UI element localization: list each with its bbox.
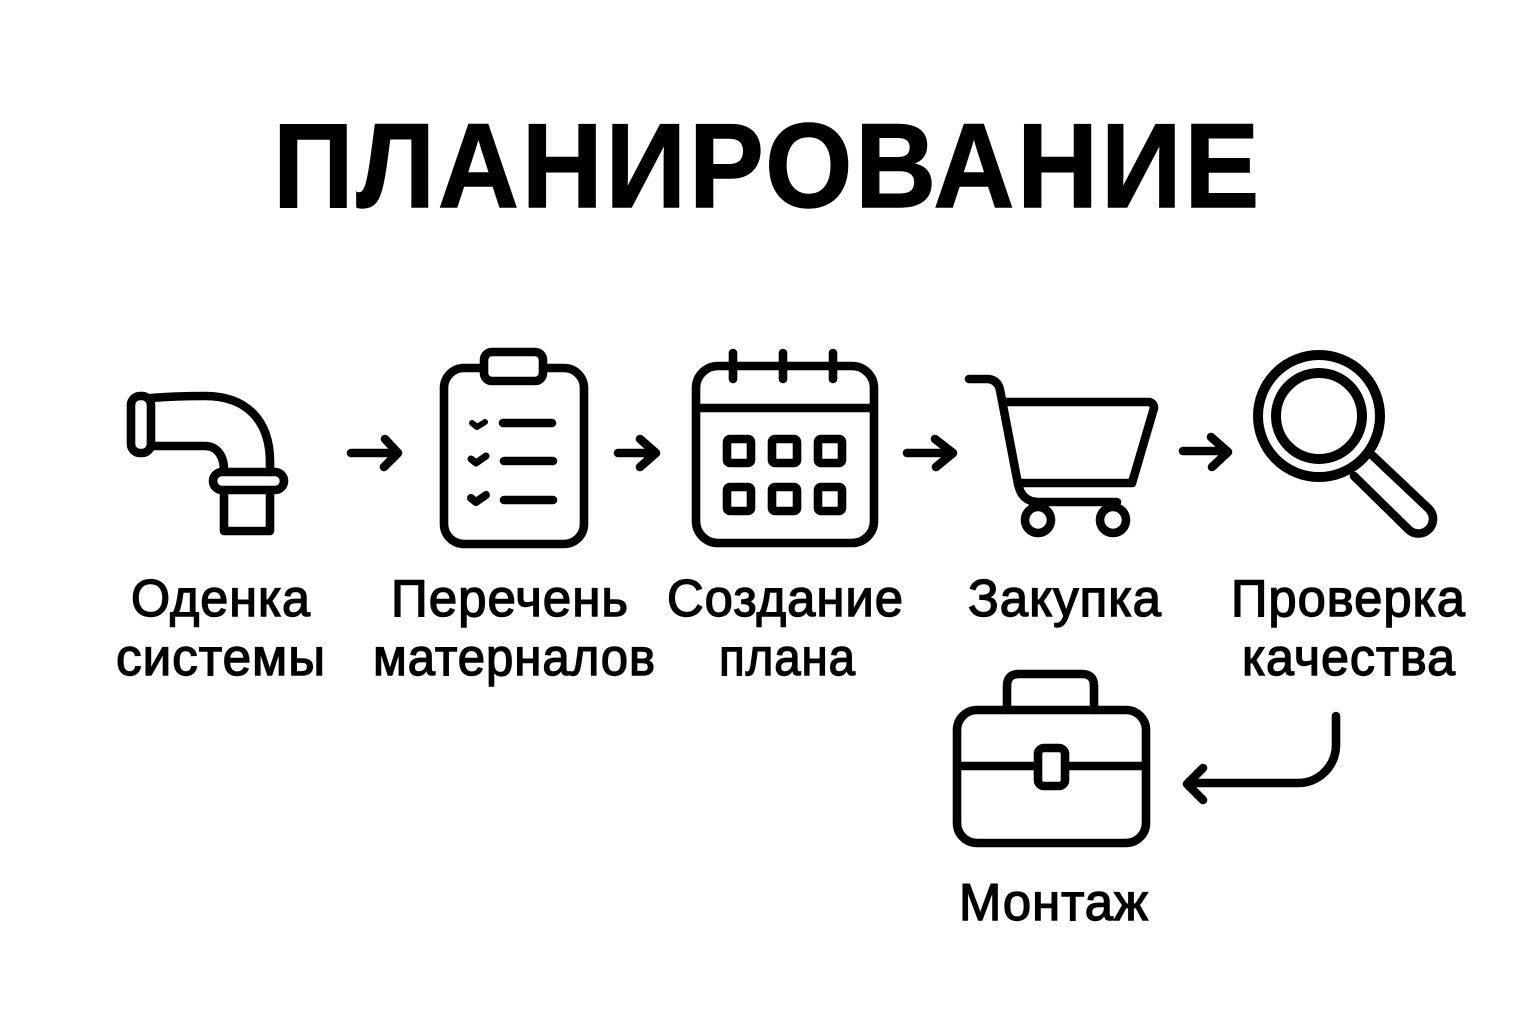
step: purchase [968, 379, 1162, 628]
arrow: step 3 to 4 [907, 439, 953, 467]
label: installation: Монтаж [959, 874, 1149, 932]
title: ПЛАНИРОВАНИЕ [273, 99, 1262, 233]
label: system assessment: системы [116, 629, 326, 687]
arrow: step 1 to 2 [351, 439, 398, 467]
arrow: step 2 to 3 [618, 439, 656, 467]
label: materials list [373, 570, 656, 687]
arrow: step 5 back to installation [1187, 716, 1336, 800]
icon: magnifying glass [1258, 355, 1433, 534]
arrow: step 4 to 5 [1183, 437, 1228, 467]
label: quality check: Проверка [1231, 570, 1466, 628]
step: create plan [667, 353, 904, 687]
label: quality check [1231, 570, 1466, 687]
step: system assessment [116, 396, 326, 687]
label: quality check: качества [1242, 629, 1456, 687]
label: create plan [667, 570, 904, 687]
label: materials list: матерналов [373, 629, 656, 687]
label: materials list: Перечень [391, 570, 629, 628]
icon: clipboard checklist [444, 352, 584, 544]
label: system assessment: Оденка [131, 570, 311, 628]
icon: toolbox [957, 674, 1146, 843]
icon: pipe elbow [131, 396, 284, 531]
label: create plan: плана [719, 629, 856, 687]
step: installation [957, 674, 1149, 932]
icon: shopping cart [969, 379, 1154, 533]
label: system assessment [116, 570, 326, 687]
icon: calendar [696, 353, 874, 543]
label: purchase: Закупка [968, 570, 1162, 628]
label: create plan: Создание [667, 570, 904, 628]
step: materials list [373, 352, 656, 687]
step: quality check [1231, 355, 1466, 687]
